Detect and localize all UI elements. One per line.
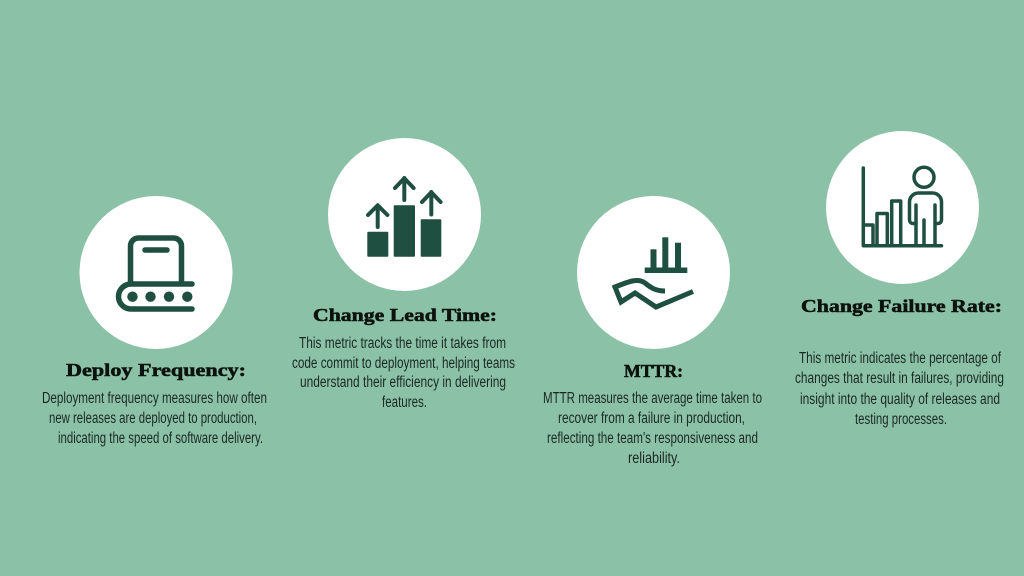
panel: Change Failure Rate	[795, 131, 1004, 428]
text: Change Lead Time description: features.	[382, 394, 427, 411]
icon: conveyor belt with box	[118, 238, 192, 309]
text: Change Lead Time description: This metric tracks the time it takes from	[299, 335, 506, 352]
text: MTTR description: reliability.	[628, 450, 680, 467]
text: MTTR description: MTTR measures the average time taken to	[543, 390, 762, 407]
text: Deploy Frequency description	[42, 390, 267, 447]
text: Deploy Frequency description: new releases are deployed to production,	[49, 410, 257, 427]
icon circle: MTTR	[577, 196, 730, 349]
text: Deploy Frequency description: indicating the speed of software delivery.	[58, 430, 263, 447]
text: Change Failure Rate description	[795, 350, 1004, 428]
icon: hand holding bar chart	[615, 237, 693, 307]
text: Change Lead Time description	[292, 335, 515, 411]
icon: bars with up arrows	[367, 178, 441, 257]
heading: Change Lead Time: Change Lead Time:	[313, 305, 497, 325]
heading: MTTR: MTTR:	[624, 361, 683, 381]
text: MTTR description: recover from a failure in production,	[558, 410, 745, 427]
icon circle: failure rate	[826, 131, 979, 284]
panel: Change Lead Time	[292, 138, 515, 411]
icon circle: deploy	[80, 196, 232, 349]
text: Change Lead Time description: code commit to deployment, helping teams	[292, 355, 515, 372]
icon: person beside bar chart	[863, 167, 942, 246]
text: Change Lead Time description: understand their efficiency in delivering	[300, 374, 506, 391]
icon circle: lead time	[328, 138, 481, 291]
heading: Change Failure Rate: Change Failure Rate:	[801, 296, 1002, 316]
text: MTTR description: reflecting the team's responsiveness and	[547, 430, 758, 447]
panel: Deploy Frequency	[42, 196, 267, 447]
text: Change Failure Rate description: testing processes.	[855, 411, 947, 428]
text: Deploy Frequency description: Deployment frequency measures how often	[42, 390, 267, 407]
heading: Deploy Frequency: Deploy Frequency:	[66, 360, 246, 380]
text: MTTR description	[543, 390, 762, 467]
panel: MTTR	[543, 196, 762, 467]
